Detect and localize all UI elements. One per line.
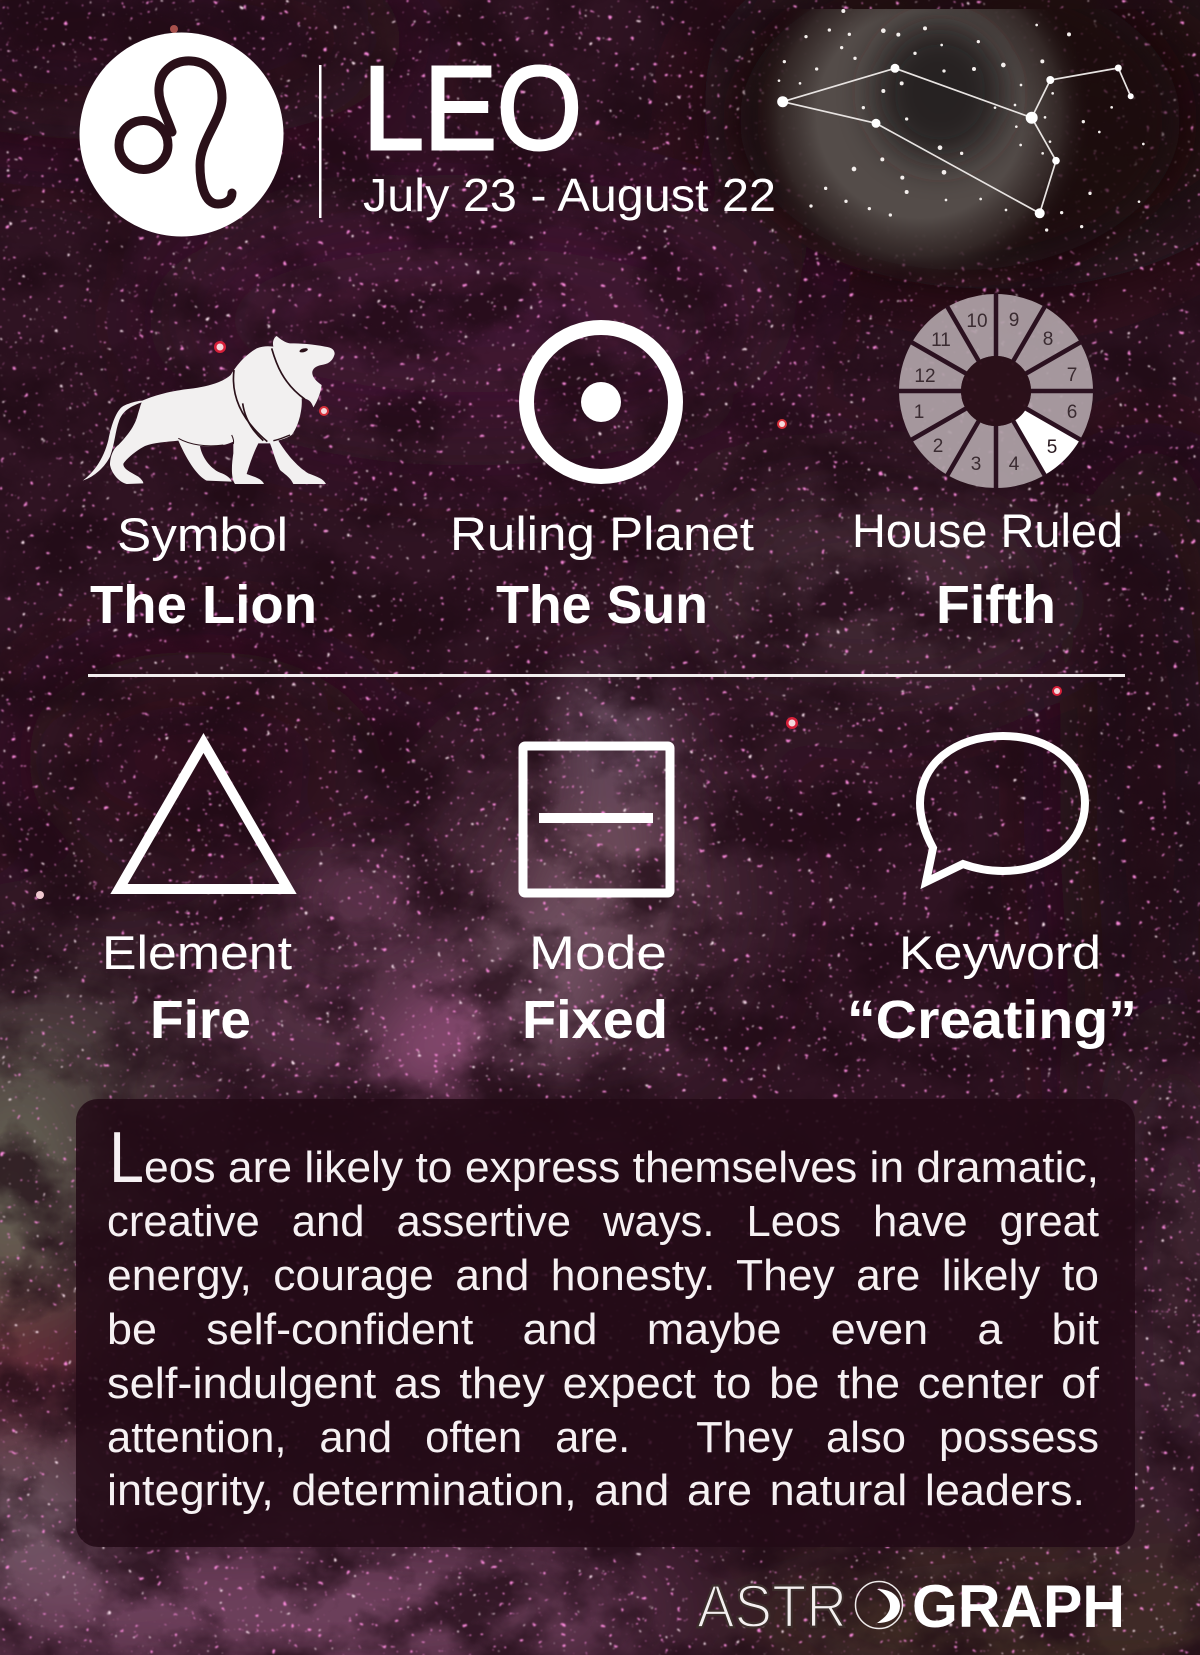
icon: Leo zodiac glyph xyxy=(80,32,284,236)
icon: sun symbol xyxy=(526,328,676,476)
description text: self-indulgent as they expect to be the center of xyxy=(107,1359,1100,1408)
description text: attention, and often are. They also possess xyxy=(107,1413,1099,1462)
label: symbol: The Lion xyxy=(90,575,317,635)
logo: Astrograph xyxy=(697,1573,1125,1640)
description text: eos are likely to express themselves in dramatic, xyxy=(144,1143,1099,1192)
bright background stars xyxy=(36,25,1062,899)
description text: creative and assertive ways. Leos have great xyxy=(107,1197,1099,1246)
logo: Astrograph: ASTR xyxy=(697,1573,847,1640)
label: mode: Fixed xyxy=(522,990,668,1050)
date range: July 23 - August 22 xyxy=(363,169,776,221)
description text xyxy=(107,1118,1100,1515)
label: ruling planet: Ruling Planet xyxy=(450,507,754,560)
icon: house wheel: 11 xyxy=(931,330,951,351)
label: ruling planet xyxy=(450,507,754,635)
header divider xyxy=(319,65,322,218)
icon: house wheel: 2 xyxy=(933,436,943,457)
icon: house wheel: 10 xyxy=(966,311,988,332)
icon: house wheel: 3 xyxy=(971,454,981,475)
label: house ruled xyxy=(852,504,1123,635)
panel: description background xyxy=(76,1099,1135,1547)
icon: house wheel: 7 xyxy=(1067,365,1077,386)
description text: energy, courage and honesty. They are likely to xyxy=(107,1251,1099,1300)
description text: be self-confident and maybe even a bit xyxy=(107,1305,1099,1354)
label: keyword: Keyword xyxy=(899,926,1101,979)
constellation of Leo xyxy=(740,0,1180,287)
icon: house wheel: 1 xyxy=(914,402,924,423)
label: mode: Mode xyxy=(529,926,667,979)
label: element: Fire xyxy=(150,990,251,1050)
label: house ruled: Fifth xyxy=(936,575,1056,635)
icon: house wheel: 5 xyxy=(1047,437,1057,458)
icon: fire triangle xyxy=(119,743,288,889)
description text: integrity, determination, and are natural leaders. xyxy=(107,1466,1085,1515)
title: LEO xyxy=(363,42,582,175)
icon: house wheel: 8 xyxy=(1043,329,1053,350)
icon: lion xyxy=(83,336,335,484)
label: symbol: Symbol xyxy=(117,508,288,561)
label: ruling planet: The Sun xyxy=(496,575,708,635)
label: element xyxy=(102,926,292,1050)
icon: house wheel: 12 xyxy=(914,366,936,387)
label: keyword: “Creating” xyxy=(847,990,1137,1050)
label: house ruled: House Ruled xyxy=(852,504,1123,557)
icon: fixed mode square xyxy=(523,746,670,893)
logo: Astrograph: GRAPH xyxy=(912,1573,1125,1640)
label: keyword xyxy=(847,926,1137,1050)
label: mode xyxy=(522,926,668,1050)
icon: speech bubble xyxy=(920,736,1085,882)
icon: house wheel xyxy=(898,293,1094,489)
section divider xyxy=(88,674,1125,677)
icon: house wheel: 9 xyxy=(1009,310,1019,331)
icon: house wheel: 4 xyxy=(1009,454,1020,475)
description text: L xyxy=(109,1118,144,1198)
icon: house wheel: 6 xyxy=(1067,402,1077,423)
label: element: Element xyxy=(102,926,292,979)
label: symbol xyxy=(90,508,317,635)
